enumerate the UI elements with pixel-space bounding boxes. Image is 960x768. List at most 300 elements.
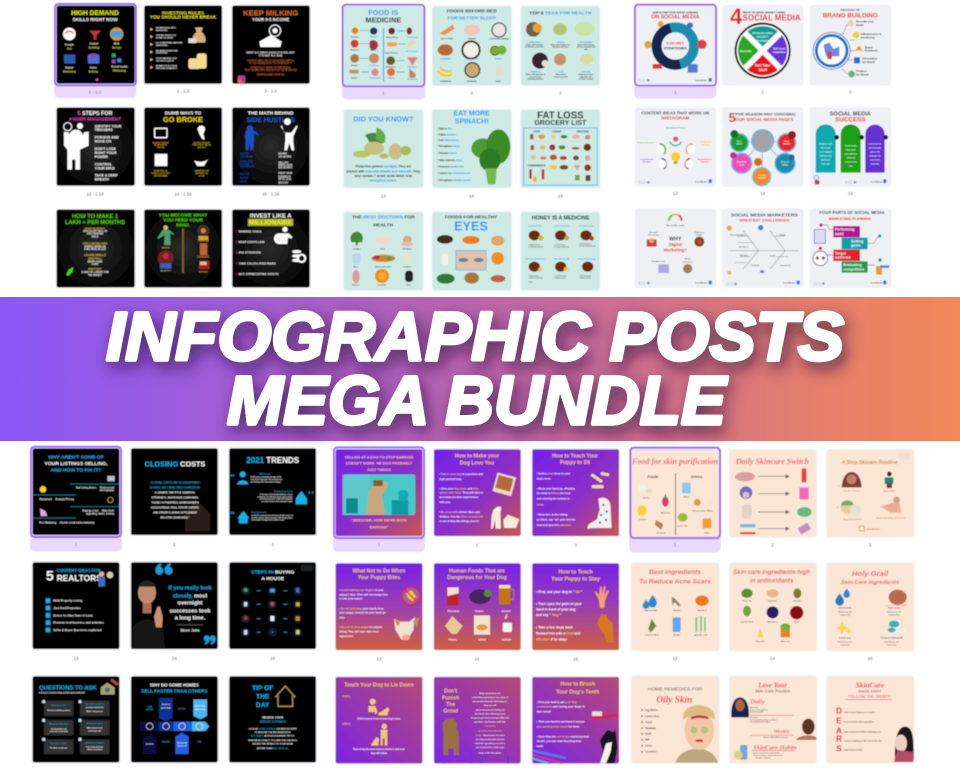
quote text: overnight [177,601,203,607]
card: daily skincare switch [730,450,816,548]
body text [537,471,576,527]
pistachio illustration [353,127,411,160]
body text: and causing his bottom to [537,497,570,501]
badge and node text: TIME [197,742,202,744]
card: investing rules [144,6,222,94]
figures text: SKILLED [278,162,289,164]
heading: PROCESS OF [841,8,860,12]
heading: GREATEST CHALLENGES [739,218,790,223]
heading [731,212,799,223]
captions: Honey Lemon Water [692,510,713,513]
captions: Beetroot [661,511,670,514]
badge and node text: Location [146,743,153,746]
captions [837,486,905,521]
captions: Exercise [352,284,360,286]
captions: Azelaic [673,634,681,637]
dog photo [343,474,415,515]
column divider [675,473,676,535]
body text: TO ENSURE THE INFORMATION IS [255,731,291,734]
captions: LUCK [199,175,205,177]
top right tag [898,452,911,460]
tea descriptions: Helps with bloating, [577,43,595,46]
step icons [848,20,863,77]
captions: Sweet Potatoes [385,51,398,54]
body text: affection if he stays [536,638,567,642]
heading: MIND. [176,223,190,229]
card: closing costs: 2 [173,542,176,547]
captions: GAMBLING OR [194,170,209,173]
card: food is medicine: The Pancreas [406,51,418,53]
heading: YOUR 9-5 INCOME [252,17,289,22]
heading: JUST THINKS [367,468,392,472]
card: daily skincare switch: 2 [771,543,774,548]
card: social media marketers fishbone [723,209,802,287]
body text: dog's nose. [537,476,552,480]
list [46,598,104,632]
body text [537,700,589,748]
card: did you know: 13 [381,193,386,198]
heading: 5 [46,568,54,584]
heading: Your Puppy to Stay [551,577,600,583]
routine details: Moisturizer/SPF [750,711,765,714]
captions: Sunlight [353,248,361,251]
ingredient icons [835,588,907,635]
heading [664,237,687,253]
heading: 5 [729,111,736,125]
remedy notes: 2. Juice of a lemon [528,247,543,249]
body text: WORK HARD [88,260,103,263]
heading: Dog Love You [460,461,494,467]
badge and node text: Buyers love [195,706,205,708]
card: four parts of social media [811,209,890,287]
arch text: strategies for [869,155,881,158]
heading: Daily Skincare Switch [735,457,809,466]
ingredient labels: Lactic acid [839,637,851,640]
card: steve jobs quote: 14 [172,656,177,661]
heading: OUR SOCIAL MEDIA PAGES [735,117,794,122]
heading: REALTORS [57,573,102,583]
heading [150,10,217,20]
dears acronym: D [836,706,842,716]
step 2 [342,724,405,755]
instagram handle: @erublecare [866,529,881,531]
remedy notes: 2. Cup of warm water [579,244,596,247]
connectors [842,25,855,73]
box text: Looking back and [51,728,66,730]
heading: A HOUSE [261,576,285,582]
remedy notes: 1. 2 tsp honey [554,244,565,247]
heading: Skin Care Routine [755,688,791,693]
heading [46,568,102,584]
arrows [257,591,287,632]
decorative bars [443,752,509,763]
quote text: a long time. [175,616,206,622]
tea descriptions [525,43,595,81]
dears text [844,711,883,752]
body text: lower. [537,502,544,506]
panel: dog training thumbnails [333,447,619,763]
arch text: build more [821,160,830,162]
card: food for skin purification [629,447,721,553]
card: foods before bed: KIWIS [495,59,502,61]
captions: BETTING ON [196,173,208,175]
figures text: EARNINGS [278,175,291,178]
captions [151,142,212,177]
skill labels: Editing [89,69,98,73]
pie wheel: Sell Your [755,64,771,68]
remedies list: Cucumber [645,752,657,754]
body text: AND OTHER CLOSING SETTLEMENT [153,511,197,514]
arch text: more reach [870,160,880,162]
idea captions: Promo Content [638,142,653,145]
remedies list: Yogurt [645,721,653,724]
body text: IT'S NOT ALL BAD [259,53,282,57]
body text: SPECIALIZE SKILL IN [83,230,107,233]
remedy notes: 1. Raw honey [528,275,539,277]
top right dots [301,565,313,571]
heading: STEPS IN BUYING [251,569,295,575]
card: why homes sell faster [131,676,218,762]
nine health icons [350,232,413,283]
box text: you have had before [86,707,104,709]
arch text: Social media [845,146,857,148]
steps list: BREATH [95,178,109,182]
body text: not motivated to make it go [476,746,505,749]
footer logos: LearnSocial [871,281,882,284]
heading: Growl [443,708,459,714]
body text: • Then you need to get them to accept [537,720,585,724]
rules text: INVESTING [156,53,168,55]
heading: SOCIAL MEDIA [830,111,871,117]
body text: the ticker from the time [478,729,503,732]
food images [437,22,507,78]
body text: also contain 7 amino acids which help [355,174,412,178]
body text: strengthen bones. [370,179,397,183]
badge and node text: Homes in [162,704,170,706]
body text: you opening their mouth for them [537,724,580,728]
card: social media success [811,108,890,196]
heading: SOCIAL MEDIA [743,14,801,23]
captions: brand [697,234,703,237]
card: food is medicine: The Uterus [407,65,417,68]
heading: YOU BECOME WHAT [159,213,207,219]
card: target audience on social media [634,4,716,99]
body text: what he's growling at so he's [475,742,506,745]
captions: BUYING THINGS [153,142,169,144]
routine details: Remove Makeup/Cleanse/Tone [750,719,777,721]
body text: HIGH DEMAND [87,233,104,236]
card: what not to do when puppy bites [336,563,422,662]
captions: Juice [704,532,711,534]
steps list: CONTROL [95,162,113,166]
heading: YELLING AT A DOG TO STOP BARKING [344,455,414,459]
illustration: woman in towel [675,705,718,763]
list: 2. KEEP COSTS LOW [236,240,265,244]
list: Seller & Buyer Questions explained [53,628,101,632]
captions: Water [683,496,689,499]
body text: RELATED COMPANIES." [161,516,190,519]
figures text: $5 PER [240,178,248,180]
heading: Don't [444,689,457,695]
four planning bars: competitors [843,267,864,271]
skill labels: Web [114,42,120,46]
card: holy grail skincare: 15 [868,656,873,661]
card: best ingredients for acne scars: 13 [673,656,678,661]
body text: Pistachios protect eyesight. They are [355,165,411,169]
framed grocery grid: CARBS [552,130,562,134]
body text: • Talk to your dog in a positive and [439,472,483,476]
badge and node text: homes sell [177,746,187,748]
captions: Sleep [380,249,386,251]
icon: gold coins [188,53,207,69]
benefits list [437,129,471,182]
steps list: FORGIVE AND [95,135,119,139]
circle labels: goals [739,164,745,166]
card: holy grail skincare: Balancing and [887,612,902,614]
step text: Positioner [865,49,878,53]
remedies list [645,709,660,754]
card: fat loss grocery list: 15 [558,193,563,198]
captions: Aloe vera [781,640,791,643]
captions: Apply Hydrating moisturizer [876,516,905,519]
heading: DUMB WAYS TO [165,110,201,115]
body text: HARD [92,263,99,266]
routines text [749,698,797,751]
captions: Soybeans [768,601,778,603]
heading: SKILLS RIGHT NOW [72,17,118,22]
list: 5. BUY APPRECIATING ASSETS [236,272,279,276]
heading [141,682,208,693]
circle labels: Easy to [781,161,790,164]
issue text [39,486,115,525]
chevrons [231,474,313,514]
icon: closing quote mark [204,635,216,645]
pie wheel: products [756,38,769,42]
arch text: helps reach [846,150,856,152]
heading: Holy Grail [852,569,889,578]
card: yelling at a dog [333,447,425,552]
card: love your skin care routine [730,677,817,763]
body text: upset but now are hiding on [476,709,505,712]
illustrations: three women [731,697,817,760]
icon: bones [590,472,609,488]
captions: Compare cost [652,260,665,263]
body text: YOU'LL BE HIGH PAID [83,242,108,245]
fishbone labels: Keyword results [730,233,744,236]
benefits list: • Prevents cancer [437,152,457,155]
remedies list: Tomatoes [645,727,657,730]
heading [447,8,497,22]
captions: Rose Oil [756,641,764,643]
card: invest like a millionaire [232,210,310,287]
panel: dark finance and motivation thumbnails [54,3,310,287]
card: brand building [811,6,890,94]
body text: ATTORNEYS, INSURANCE COMPANIES, [151,496,199,499]
step 1: Hold a treat in front of your dog's nose. [357,717,401,720]
three arches [816,124,888,173]
body text: hand in front of your dog [536,607,576,611]
body text: BETTER THAN ANYONE ELSE . [257,747,289,750]
box text: Your team and your [86,745,103,748]
benefits list: • Lowers high blood pressure [437,173,471,175]
body text: THAT WORK WITH AND BUY OF YOUR BRAND [245,69,297,72]
framed grocery grid: CONDIMENTS [528,164,546,168]
card: holy grail skincare: Balancing and [838,612,853,614]
body text: OF FEES, INCLUDING FEES CHARGED BY [150,486,201,489]
icon: photo frame [492,472,516,496]
circle labels: content [758,177,766,180]
idea captions: Educational Videos [666,126,686,129]
heading [733,569,810,585]
heading: Teach Your Dog to Lie Down [344,682,414,688]
trend text: more square footage and a smaller social [251,519,284,522]
figure captions: SUCCESS [199,271,209,273]
four planning bars: audit [835,232,845,236]
heading [248,213,293,227]
remedies list: Honey [645,746,653,748]
body text: packed with essential vitamin and minerals. They [346,169,421,173]
skill labels: Marketing [63,69,76,73]
tea descriptions: Helps with weight loss, [551,43,571,46]
heading [552,454,598,466]
step text: Inflexpression & [861,32,881,36]
card: ways to make money: 2 [761,89,764,94]
icon: two dogs [491,507,519,529]
list: 1. MINIMIZE TAXES [236,229,262,233]
body text: teeth [537,744,543,748]
body text: (DIGITAL) [88,256,102,260]
heading: GO BROKE [163,115,203,124]
figures text: HOURS: [240,154,249,156]
heading: CLOSING COSTS [145,460,205,469]
body text: • First, ask your dog to " Sit " [536,590,583,594]
heading: BRAND BUILDING [823,13,878,20]
step text: Brand [865,45,873,49]
issue text: Overpriced → Strategic Pricing [39,498,74,501]
badge and node text: clean homes [194,709,206,711]
card: math behind side hustles [232,108,310,196]
heading [648,686,703,705]
rules text: ALWAYS FOLLOW A [156,65,177,68]
heading: 4 Step Skicare Routine [842,460,898,466]
heading: HIGH DEMAND [71,10,119,17]
body text: they are still [484,704,497,707]
heading: Punish [442,695,459,701]
captions: OATMEAL [466,80,478,83]
heading: THE MATH BEHIND [248,110,294,116]
captions: Licorice Root [741,621,754,624]
heading: SPINACH! [455,119,489,126]
card: yelling at a dog: 1 [378,543,381,548]
heading: INSTAGRAM [661,116,689,121]
heading [729,111,795,125]
reason circles [730,130,796,186]
figures text: $30 HOURLY [278,168,293,170]
teal rules [33,484,119,518]
body text [471,693,510,754]
captions: UNDERSTAND [154,174,168,177]
body text: things to get closer and possibly end [471,717,510,720]
heading [823,8,878,20]
trend icons [237,471,307,523]
captions: Niacinamide [644,610,658,612]
body text: ESPECIALLY WHEN YOU'RE DOING [251,66,291,69]
food and organ pairs, right column [386,27,418,78]
heading: FOR A SUCCESSFUL REAL ESTATE BUILD MINDSET [39,691,86,694]
rules text: GET RICH QUICK [156,60,174,62]
quote text [168,586,213,622]
badge and node text: CURB [147,706,153,708]
heading: EAT MORE [453,111,490,118]
heading: To Reduce Acne Scars [639,579,711,586]
icons: person at desk and coin stack [274,227,306,263]
box text [47,704,105,751]
icon: cartoon dog [597,614,613,643]
four planning bars: audience [835,256,851,260]
card: listings not selling: 1 [75,542,78,547]
dears acronym: R [836,734,842,744]
satellite icons [644,21,707,73]
circle labels [736,141,792,180]
body text: • First you need to get your dog [537,700,577,704]
four planning bars: Performing [835,228,855,232]
icon: no biting sign [402,587,420,605]
heading [159,213,207,229]
caption [351,519,407,529]
card: best ingredients for acne scars [632,563,719,661]
dears text: pply sunscreen before sleeping sun [844,731,881,733]
rule bullets [150,28,153,69]
fishbone labels: Feedback [751,265,760,267]
remedy notes: 2. Cup of warm tea [554,246,569,249]
pie wheel: Stuff [759,68,768,72]
remedy notes: 2. Warm cinnamon [528,277,543,279]
box text: your time in the field [50,730,68,733]
heading: INVESTING RULES [162,10,204,15]
idea captions: Inspirational [640,158,653,161]
body text: to see if they like things you do [439,519,479,523]
four planning bars: Target [835,251,847,255]
circle labels: follow [782,164,788,166]
box text: What kind of work [87,727,104,730]
body text: "CLOSING COSTS ARE AN ASSORTMENT [150,481,200,484]
captions [741,600,802,643]
tea descriptions: nausea, stomach and [577,46,595,49]
heading: 4 [730,4,743,29]
food and organ pairs, left column [349,27,379,76]
tea descriptions: immune system [554,75,568,78]
card: ways to make money [723,4,802,94]
heading: WHY AREN'T SOME OF [48,454,104,460]
steps list: TRIGGERS [95,128,114,132]
card: investing rules: 2 - 1:3 [177,89,190,94]
list: Before Vs After State of Land [53,613,93,617]
icons: six skills [63,27,123,64]
dears acronym: A [836,725,842,735]
connector lines [739,141,787,177]
captions: Walnuts [351,64,358,67]
timeline arrow [140,722,209,731]
card: keep milking [232,6,310,94]
figures text: FREELANCE [278,164,293,167]
heading: CONTENT IDEAS FOR [57,568,101,573]
dears text: leep 8 hours daily [844,750,863,752]
heading: MILLIONAIRE [249,220,293,227]
list: NEW Property Listing [53,599,83,603]
step 1 [342,696,401,720]
heading: Your Puppy Bites [358,575,400,581]
heading [353,568,405,581]
